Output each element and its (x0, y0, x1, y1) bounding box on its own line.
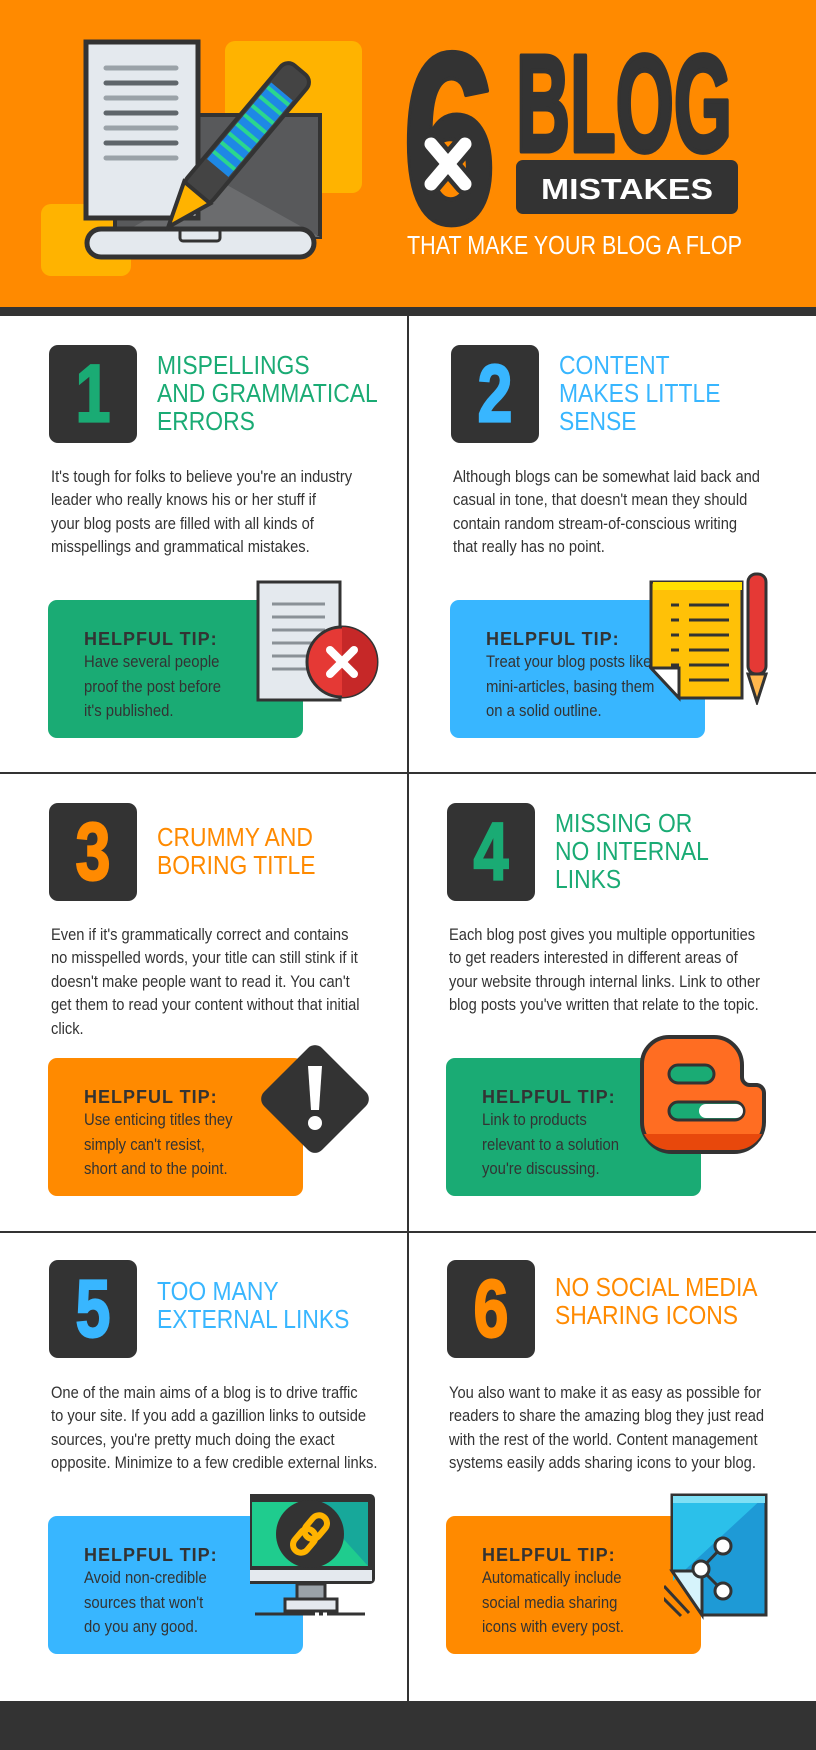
body 1: misspellings and grammatical mistakes. (51, 538, 310, 556)
icon: share document (664, 1494, 768, 1620)
number 5: 5 (76, 1263, 110, 1354)
tip 3: short and to the point. (84, 1160, 228, 1178)
tip 5: do you any good. (84, 1618, 198, 1636)
panel 3 (48, 803, 369, 1196)
title 2 (559, 350, 720, 436)
tip 4: HELPFUL TIP: (482, 1087, 616, 1107)
tip 6 (446, 1516, 701, 1654)
number 2: 2 (478, 348, 512, 439)
number 4: 4 (474, 806, 508, 897)
title 2: CONTENT (559, 350, 670, 380)
number 2 (451, 345, 539, 443)
tip 1: Have several people (84, 653, 219, 671)
tip 1: proof the post before (84, 678, 221, 696)
tip 5: sources that won't (84, 1594, 203, 1612)
panel 5 (48, 1260, 377, 1654)
title 4: MISSING OR (555, 808, 692, 838)
title 1 (157, 350, 378, 436)
icon: blogger logo (640, 1035, 766, 1154)
title: 6 blog mistakes (402, 40, 742, 265)
title 4: NO INTERNAL (555, 836, 709, 866)
tip 6: HELPFUL TIP: (482, 1545, 616, 1565)
body 4 (449, 926, 760, 1014)
tip 6: Automatically include (482, 1569, 622, 1587)
body 6: with the rest of the world. Content management (449, 1431, 758, 1449)
title 3: BORING TITLE (157, 850, 315, 880)
number 1 (49, 345, 137, 443)
body 6 (449, 1384, 764, 1472)
body 5 (51, 1384, 377, 1472)
icon: notepad and pencil (649, 572, 768, 705)
tip 1: it's published. (84, 702, 174, 720)
body 5: One of the main aims of a blog is to drive traffic (51, 1384, 358, 1402)
panel 6 (446, 1260, 768, 1654)
title 2: SENSE (559, 406, 637, 436)
body 6: You also want to make it as easy as possible for (449, 1384, 761, 1402)
header illustration: laptop with document and pen (41, 40, 362, 276)
number 1: 1 (76, 348, 110, 439)
tip 2: Treat your blog posts like (486, 653, 651, 671)
body 3: doesn't make people want to read it. You can't (51, 973, 350, 991)
title 4 (555, 808, 709, 894)
tip 2: on a solid outline. (486, 702, 602, 720)
body 5: to your site. If you add a gazillion links to outside (51, 1407, 366, 1425)
tip 2: mini-articles, basing them (486, 678, 654, 696)
body 2 (453, 468, 760, 556)
tip 4: you're discussing. (482, 1160, 600, 1178)
tip 4: Link to products (482, 1111, 587, 1129)
panel 2 (450, 345, 768, 738)
footer (0, 1701, 816, 1750)
title 1: ERRORS (157, 406, 255, 436)
tip 3: Use enticing titles they (84, 1111, 233, 1129)
body 4: to get readers interested in different areas of (449, 949, 738, 967)
body 4: your website through internal links. Link to other (449, 973, 760, 991)
panel 1 (48, 345, 378, 738)
body 3 (51, 926, 360, 1038)
body 5: opposite. Minimize to a few credible external links. (51, 1454, 377, 1472)
title 3 (157, 822, 315, 880)
tip 4: relevant to a solution (482, 1136, 619, 1154)
body 2: casual in tone, that doesn't mean they should (453, 491, 747, 509)
body 4: blog posts you've written that relate to the topic. (449, 996, 759, 1014)
title 3: CRUMMY AND (157, 822, 313, 852)
tip 2: HELPFUL TIP: (486, 629, 620, 649)
number 3: 3 (76, 806, 110, 897)
body 1: It's tough for folks to believe you're an industry (51, 468, 352, 486)
body 3: no misspelled words, your title can still stink if it (51, 949, 358, 967)
title 1: AND GRAMMATICAL (157, 378, 378, 408)
tip 1 (48, 600, 303, 738)
number 3 (49, 803, 137, 901)
body 2: contain random stream-of-conscious writing (453, 515, 737, 533)
tip 5 (48, 1516, 303, 1654)
tip 2 (450, 600, 705, 738)
title 1: MISPELLINGS (157, 350, 310, 380)
body 4: Each blog post gives you multiple opportunities (449, 926, 755, 944)
tip 3: simply can't resist, (84, 1136, 205, 1154)
number 5 (49, 1260, 137, 1358)
header (0, 0, 816, 316)
title 6 (555, 1272, 758, 1330)
body 6: readers to share the amazing blog they just read (449, 1407, 764, 1425)
tip 4 (446, 1058, 701, 1196)
title 6: SHARING ICONS (555, 1300, 738, 1330)
body 3: click. (51, 1020, 84, 1038)
title 5: TOO MANY (157, 1276, 279, 1306)
body 5: sources, you're pretty much doing the exact (51, 1431, 335, 1449)
tip 5: Avoid non-credible (84, 1569, 207, 1587)
title 4: LINKS (555, 864, 621, 894)
panel 4 (446, 803, 766, 1196)
number 6 (447, 1260, 535, 1358)
icon: monitor with link (250, 1494, 375, 1616)
title: 6 blog mistakes: MISTAKES (541, 174, 713, 206)
title 5 (157, 1276, 349, 1334)
body 2: Although blogs can be somewhat laid back and (453, 468, 760, 486)
title 5: EXTERNAL LINKS (157, 1304, 349, 1334)
body 1: leader who really knows his or her stuff if (51, 491, 316, 509)
title 6: NO SOCIAL MEDIA (555, 1272, 758, 1302)
tip 5: HELPFUL TIP: (84, 1545, 218, 1565)
body 1 (51, 468, 352, 556)
title 2: MAKES LITTLE (559, 378, 720, 408)
icon: document with error (256, 580, 378, 702)
tip 6: icons with every post. (482, 1618, 624, 1636)
body 1: your blog posts are filled with all kinds of (51, 515, 314, 533)
number 6: 6 (474, 1263, 508, 1354)
body 6: systems easily adds sharing icons to your blog. (449, 1454, 756, 1472)
number 4 (447, 803, 535, 901)
tip 6: social media sharing (482, 1594, 617, 1612)
icon: warning diamond (261, 1045, 369, 1153)
tip 1: HELPFUL TIP: (84, 629, 218, 649)
body 3: get them to read your content without that initial (51, 996, 360, 1014)
body 2: that really has no point. (453, 538, 605, 556)
tip 3 (48, 1058, 303, 1196)
tip 3: HELPFUL TIP: (84, 1087, 218, 1107)
body 3: Even if it's grammatically correct and contains (51, 926, 348, 944)
